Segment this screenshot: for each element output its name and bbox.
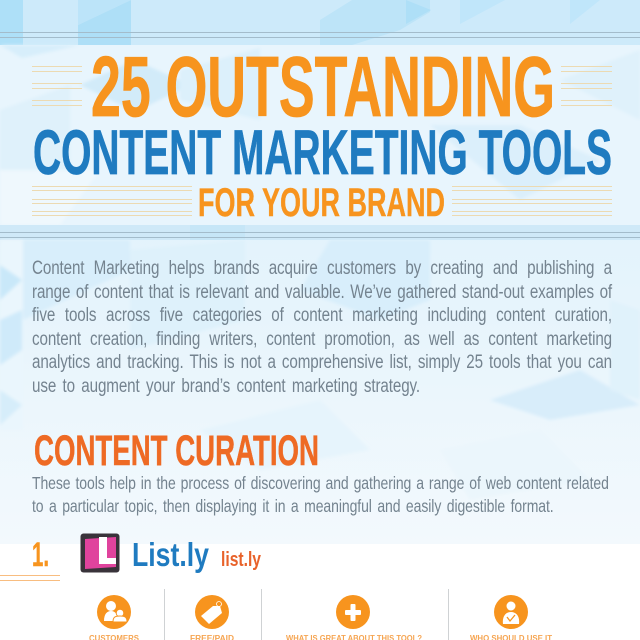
section description: to a particular topic, then displaying it in a meaningful and easily digestible format. [32, 496, 554, 516]
tool url: list.ly [221, 549, 262, 571]
intro paragraph: content creation, finding writers, content promotion, as well as content marketing [32, 328, 612, 350]
title [33, 40, 612, 225]
tool number underline [0, 575, 60, 581]
column labels [89, 634, 552, 640]
intro paragraph: analytics and tracking. This is not a comprehensive list, simply 25 tools that you can [32, 352, 612, 373]
intro paragraph: use to augment your brand’s content marketing strategy. [32, 376, 420, 396]
white tool panel [0, 544, 640, 640]
intro paragraph: Content Marketing helps brands acquire customers by creating and publishing a [32, 258, 612, 279]
section heading: content curation: CONTENT CURATION [34, 427, 319, 475]
intro paragraph: range of content that is relevant and valuable. We’ve gathered stand-out examples of [32, 282, 612, 302]
intro paragraph [32, 258, 612, 396]
icon: customers [97, 595, 131, 629]
tool name: List.ly [132, 536, 210, 573]
icon: list.ly logo [80, 534, 120, 572]
title decoration lines [32, 66, 612, 216]
tool number: 1. [32, 536, 49, 574]
intro paragraph: five tools across five categories of content marketing including content curation, [32, 305, 612, 326]
bottom double rule [0, 232, 640, 238]
icon: plus [336, 595, 370, 629]
section description: These tools help in the process of discovering and gathering a range of web content related [32, 473, 609, 493]
icon: price tag [195, 595, 229, 629]
section description [32, 473, 609, 516]
top double rule [0, 32, 640, 38]
column dividers [164, 589, 449, 640]
title: FOR YOUR BRAND [198, 181, 445, 225]
icon: person with check [494, 595, 528, 629]
